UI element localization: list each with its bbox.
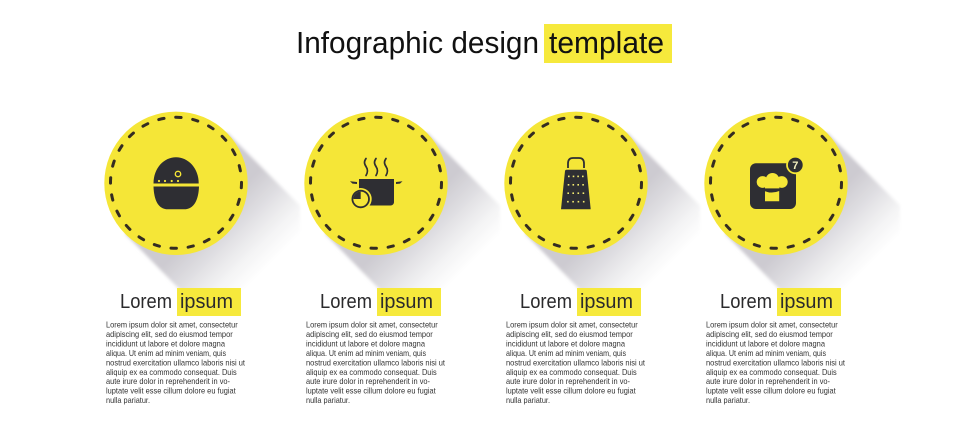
text block 2: aliquip ex ea commodo consequat. Duis (306, 367, 437, 377)
title: Infographic design (296, 25, 539, 60)
text block 3: incididunt ut labore et dolore magna (506, 338, 625, 348)
text block 4 (706, 320, 846, 405)
dashed ring 1 (110, 117, 242, 249)
panel: step 1 timer (104, 112, 300, 405)
title (296, 24, 672, 63)
text block 2: adipiscing elit, sed do eiusmod tempor (306, 329, 433, 339)
heading 4 (720, 288, 841, 316)
icon: chef hat app with badge: 7 (792, 160, 798, 172)
text block 1 (106, 320, 246, 405)
text block 4: aliquip ex ea commodo consequat. Duis (706, 367, 837, 377)
text block 1: aliqua. Ut enim ad minim veniam, quis (106, 348, 226, 358)
yellow circle 1 (104, 112, 248, 255)
icon: chef hat app with badge (750, 156, 804, 209)
text block 4: adipiscing elit, sed do eiusmod tempor (706, 329, 833, 339)
long shadow 1 (125, 132, 300, 300)
panel: step 2 cooking pot (304, 112, 500, 405)
heading 3: ipsum (580, 291, 633, 313)
text block 2: aute irure dolor in reprehenderit in vo- (306, 376, 430, 386)
text block 2: nulla pariatur. (306, 395, 350, 405)
dashed ring 3 (510, 117, 642, 249)
text block 4: incididunt ut labore et dolore magna (706, 338, 825, 348)
text block 3: nostrud exercitation ullamco laboris nisi ut (506, 357, 646, 367)
text block 3: luptate velit esse cillum dolore eu fugiat (506, 386, 636, 396)
dashed ring 2 (310, 117, 442, 249)
text block 4: Lorem ipsum dolor sit amet, consectetur (706, 320, 838, 330)
long shadow 4 (725, 132, 900, 300)
heading 2: ipsum (380, 291, 433, 313)
heading 4: ipsum (780, 291, 833, 313)
text block 1: luptate velit esse cillum dolore eu fugiat (106, 386, 236, 396)
text block 2: aliqua. Ut enim ad minim veniam, quis (306, 348, 426, 358)
text block 3: Lorem ipsum dolor sit amet, consectetur (506, 320, 638, 330)
text block 1: incididunt ut labore et dolore magna (106, 338, 225, 348)
text block 1: aliquip ex ea commodo consequat. Duis (106, 367, 237, 377)
icon: steaming pot with timer (350, 158, 402, 210)
yellow circle 4 (704, 112, 848, 255)
text block 2: nostrud exercitation ullamco laboris nisi ut (306, 357, 446, 367)
text block 3 (506, 320, 646, 405)
heading 3 (520, 288, 641, 316)
icon: cheese grater (561, 158, 591, 209)
yellow circle 3 (504, 112, 648, 255)
yellow circle 2 (304, 112, 448, 255)
text block 3: aute irure dolor in reprehenderit in vo- (506, 376, 630, 386)
icon: egg kitchen timer (154, 157, 199, 209)
dashed ring 4 (710, 117, 842, 249)
heading 4: Lorem (720, 291, 772, 313)
heading 1: ipsum (180, 291, 233, 313)
text block 1: aute irure dolor in reprehenderit in vo- (106, 376, 230, 386)
long shadow 3 (525, 132, 700, 300)
text block 4: nostrud exercitation ullamco laboris nisi ut (706, 357, 846, 367)
text block 1: Lorem ipsum dolor sit amet, consectetur (106, 320, 238, 330)
text block 3: aliquip ex ea commodo consequat. Duis (506, 367, 637, 377)
text block 1: nulla pariatur. (106, 395, 150, 405)
long shadow 2 (325, 132, 500, 300)
text block 3: adipiscing elit, sed do eiusmod tempor (506, 329, 633, 339)
heading 1: Lorem (120, 291, 172, 313)
text block 2 (306, 320, 446, 405)
text block 4: luptate velit esse cillum dolore eu fugiat (706, 386, 836, 396)
heading 1 (120, 288, 241, 316)
title: template (549, 25, 664, 60)
text block 1: adipiscing elit, sed do eiusmod tempor (106, 329, 233, 339)
text block 3: nulla pariatur. (506, 395, 550, 405)
text block 2: Lorem ipsum dolor sit amet, consectetur (306, 320, 438, 330)
text block 4: aliqua. Ut enim ad minim veniam, quis (706, 348, 826, 358)
text block 3: aliqua. Ut enim ad minim veniam, quis (506, 348, 626, 358)
heading 2: Lorem (320, 291, 372, 313)
text block 2: luptate velit esse cillum dolore eu fugiat (306, 386, 436, 396)
text block 2: incididunt ut labore et dolore magna (306, 338, 425, 348)
heading 3: Lorem (520, 291, 572, 313)
panel: step 4 chef hat app (704, 112, 900, 405)
text block 4: aute irure dolor in reprehenderit in vo- (706, 376, 830, 386)
panel: step 3 grater (504, 112, 700, 405)
text block 1: nostrud exercitation ullamco laboris nisi ut (106, 357, 246, 367)
heading 2 (320, 288, 441, 316)
text block 4: nulla pariatur. (706, 395, 750, 405)
